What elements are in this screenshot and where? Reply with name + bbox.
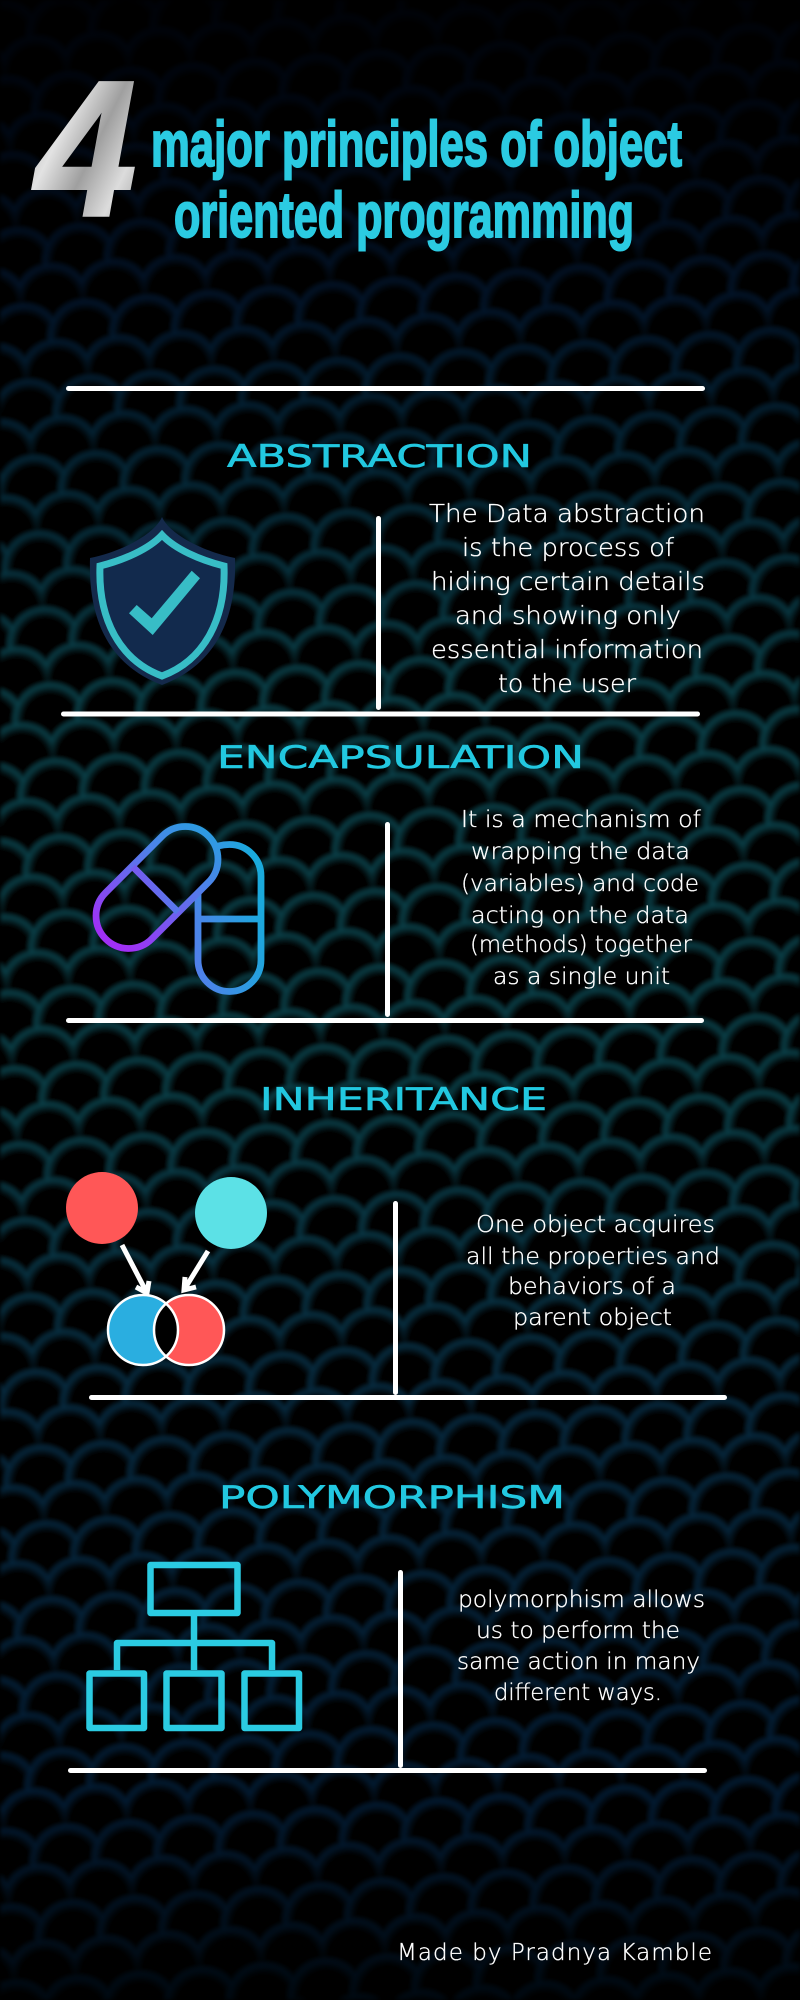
divider top <box>66 386 705 391</box>
heading: encapsulation: ENCAPSULATION <box>217 740 584 776</box>
divider <box>66 1018 704 1023</box>
text: abstraction description: to the user <box>498 669 637 698</box>
heading: inheritance: INHERITANCE <box>260 1082 547 1118</box>
section: abstraction <box>61 439 705 716</box>
icon: capsules <box>82 813 261 992</box>
vertical divider <box>385 822 390 1017</box>
text: abstraction description: hiding certain details <box>431 567 705 596</box>
divider <box>89 1395 727 1400</box>
text: encapsulation description: as a single unit <box>493 964 670 990</box>
text: polymorphism description: us to perform the <box>476 1618 680 1644</box>
heading: abstraction: ABSTRACTION <box>227 439 532 475</box>
text: encapsulation description: It is a mechanism of <box>461 807 702 833</box>
text: inheritance description: all the properties and <box>466 1244 720 1270</box>
section: polymorphism <box>68 1480 707 1773</box>
text: encapsulation description <box>461 807 702 990</box>
vertical divider <box>398 1570 403 1768</box>
title <box>32 41 682 256</box>
icon: parent circles merging into venn <box>66 1172 267 1365</box>
text: abstraction description <box>429 499 705 698</box>
text: inheritance description: behaviors of a <box>508 1274 676 1300</box>
icon: hierarchy chart <box>90 1565 299 1728</box>
text: abstraction description: essential information <box>431 635 703 664</box>
credit: Made by Pradnya Kamble <box>397 1940 712 1966</box>
text: polymorphism description: polymorphism allows <box>458 1587 705 1613</box>
text: encapsulation description: wrapping the data <box>471 839 690 865</box>
vertical divider <box>376 516 381 710</box>
text: encapsulation description: (methods) together <box>470 932 693 958</box>
text: abstraction description: and showing only <box>455 601 681 630</box>
vertical divider <box>393 1201 398 1395</box>
numeral 4: 4 <box>32 41 136 256</box>
text: inheritance description <box>466 1212 720 1331</box>
text: polymorphism description: same action in many <box>457 1649 700 1675</box>
section: inheritance <box>66 1082 727 1400</box>
divider <box>68 1768 707 1773</box>
divider <box>61 712 700 716</box>
text: abstraction description: is the process of <box>462 533 674 562</box>
text: encapsulation description: acting on the data <box>471 903 689 929</box>
text: inheritance description: parent object <box>513 1305 672 1331</box>
text: polymorphism description: different ways. <box>494 1680 662 1706</box>
section: encapsulation <box>66 740 704 1023</box>
text: inheritance description: One object acquires <box>476 1212 715 1238</box>
text: polymorphism description <box>457 1587 705 1706</box>
text: abstraction description: The Data abstraction <box>429 499 705 528</box>
heading: polymorphism: POLYMORPHISM <box>219 1480 565 1516</box>
icon: shield with check <box>90 517 235 685</box>
text: encapsulation description: (variables) and code <box>461 871 699 897</box>
